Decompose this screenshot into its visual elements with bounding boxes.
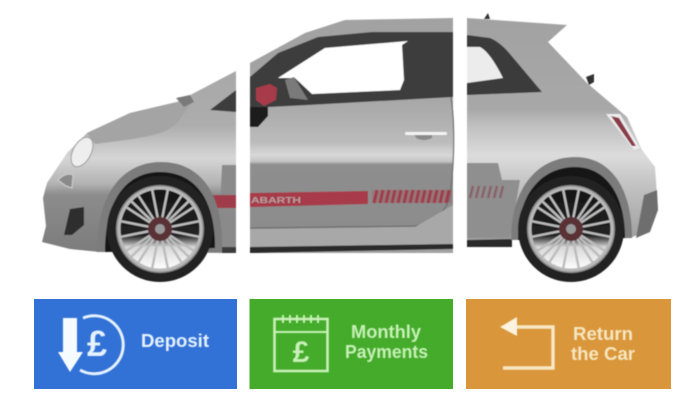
rear window glass <box>467 47 503 83</box>
front wheel <box>107 176 213 282</box>
lower door panel <box>467 163 520 238</box>
rear window frame <box>467 35 542 95</box>
car illustration split into three panels <box>42 13 658 282</box>
wheel arch <box>97 162 222 252</box>
panel: return the car <box>466 299 671 389</box>
label: return the car <box>571 324 635 364</box>
icon: calendar with pound: £ <box>293 336 310 369</box>
label: deposit: Deposit <box>141 331 209 351</box>
icon: return arrow <box>500 317 553 368</box>
panel: deposit <box>34 299 237 389</box>
bumper <box>636 190 658 238</box>
label: monthly payments: Monthly <box>351 322 421 342</box>
window frame <box>250 32 453 108</box>
sill stub <box>222 247 236 253</box>
door body <box>250 95 453 253</box>
car panel: rear section <box>467 13 658 282</box>
label: return the car: the Car <box>571 344 635 364</box>
roof antenna <box>484 13 490 19</box>
sill <box>467 239 512 247</box>
label: monthly payments <box>345 322 428 362</box>
mirror arm <box>250 107 268 127</box>
car panel: front section <box>42 71 236 282</box>
stripe <box>212 195 236 208</box>
headlight <box>67 134 97 170</box>
stripe text: ABARTH <box>251 196 301 205</box>
bonnet <box>87 102 190 144</box>
label: return the car: Return <box>573 324 633 344</box>
mirror <box>256 84 277 106</box>
quarter light <box>285 77 308 100</box>
tail light <box>606 114 640 150</box>
windscreen base <box>210 90 236 112</box>
washer nozzle <box>586 74 594 85</box>
fog lamp <box>58 174 73 188</box>
wheel arch <box>511 157 632 240</box>
stripe hatch <box>372 190 452 203</box>
rear wheel <box>518 176 624 282</box>
stripe fade <box>470 186 503 198</box>
door edge <box>250 97 454 228</box>
lower door panel <box>218 165 236 253</box>
door handle <box>414 133 432 140</box>
air intake <box>64 207 84 235</box>
panel: monthly payments <box>250 299 453 389</box>
wiper <box>176 95 194 107</box>
bottom edge <box>250 244 453 253</box>
side window <box>278 41 408 94</box>
icon: pound coin with down arrow: £ <box>87 323 107 364</box>
sill <box>250 205 453 248</box>
stripe: solid and hatched <box>250 191 368 207</box>
icon: pound coin with down arrow <box>58 316 123 374</box>
label: monthly payments: Payments <box>345 342 428 362</box>
icon: calendar with pound <box>274 315 328 371</box>
car panel: middle section <box>250 18 454 253</box>
